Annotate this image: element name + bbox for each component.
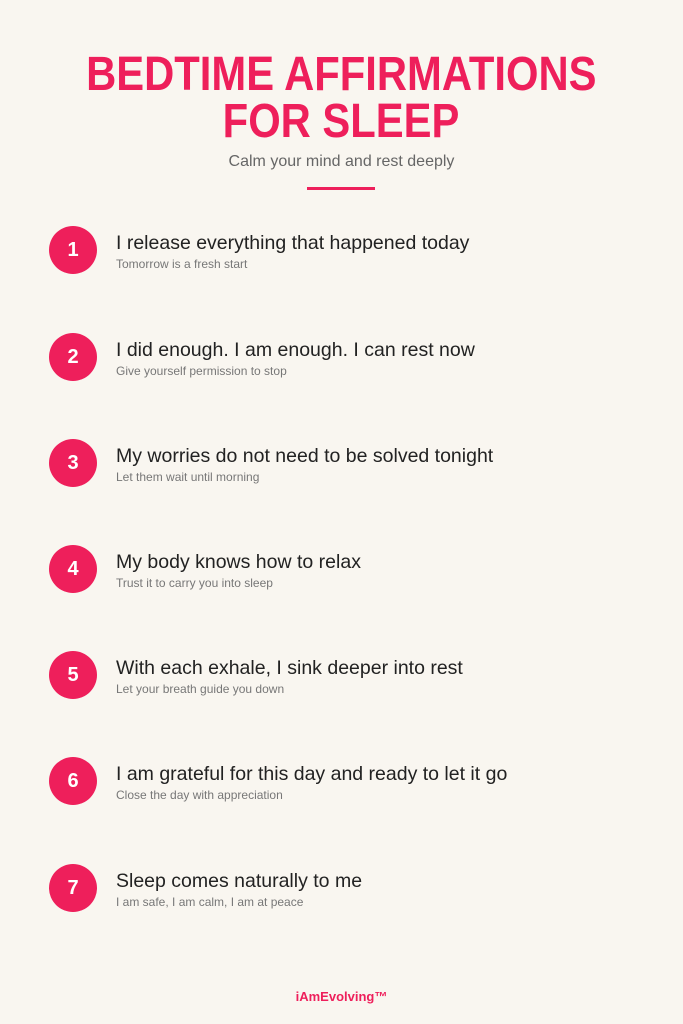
item 2: 2: [67, 346, 79, 368]
item 5: With each exhale, I sink deeper into rest: [116, 657, 463, 679]
item 3: My worries do not need to be solved tonight: [116, 445, 493, 467]
item 7: [49, 864, 362, 912]
item 2: I did enough. I am enough. I can rest now: [116, 339, 475, 361]
item 1: [49, 226, 470, 274]
item 7: Sleep comes naturally to me: [116, 870, 362, 892]
item 3: [49, 439, 494, 487]
item 7: 7: [67, 877, 79, 899]
item 7: I am safe, I am calm, I am at peace: [116, 895, 303, 909]
item 2: Give yourself permission to stop: [116, 364, 287, 378]
footer brand: iAmEvolving™: [296, 989, 387, 1004]
item 1: I release everything that happened today: [116, 232, 469, 254]
item 5: 5: [67, 664, 79, 686]
item 4: 4: [67, 558, 79, 580]
item 6: I am grateful for this day and ready to let it go: [116, 763, 507, 785]
item 4: My body knows how to relax: [116, 551, 361, 573]
item 1: 1: [67, 239, 79, 261]
item 4: Trust it to carry you into sleep: [116, 576, 273, 590]
item 3: 3: [67, 452, 79, 474]
title: BEDTIME AFFIRMATIONS: [86, 48, 597, 101]
subtitle: Calm your mind and rest deeply: [229, 153, 454, 170]
item 4: [49, 545, 361, 593]
title: FOR SLEEP: [223, 95, 460, 148]
item 2: [49, 333, 475, 381]
item 5: [49, 651, 463, 699]
item 3: Let them wait until morning: [116, 470, 259, 484]
item 6: Close the day with appreciation: [116, 788, 283, 802]
item 5: Let your breath guide you down: [116, 682, 284, 696]
item 6: 6: [67, 770, 79, 792]
title: [86, 48, 597, 148]
item 1: Tomorrow is a fresh start: [116, 257, 247, 271]
item 6: [49, 757, 507, 805]
